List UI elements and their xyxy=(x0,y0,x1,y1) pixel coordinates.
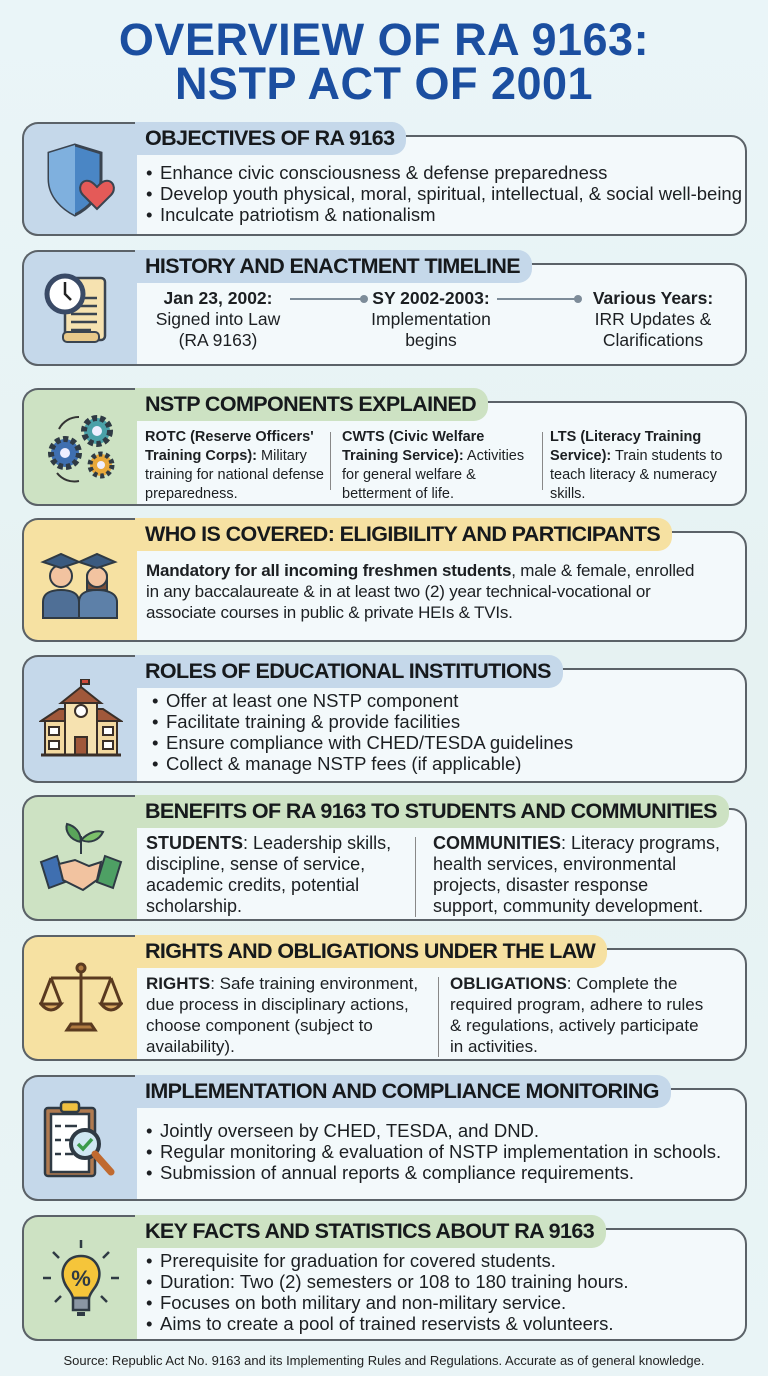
bullets: roles: Ensure compliance with CHED/TESDA guidelines xyxy=(166,732,573,753)
header: objectives xyxy=(135,122,406,155)
bullets: key facts: Duration: Two (2) semesters or 108 to 180 training hours. xyxy=(160,1271,629,1292)
column: students: discipline, sense of service, xyxy=(146,854,365,874)
panel: roles xyxy=(22,655,747,783)
bullets: key facts: Focuses on both military and non-military service. xyxy=(160,1292,566,1313)
timeline: Clarifications xyxy=(603,330,703,350)
timeline: IRR Updates & xyxy=(595,309,711,329)
column: rights: availability). xyxy=(146,1037,235,1056)
column: students: STUDENTS: Leadership skills, xyxy=(146,833,391,853)
title xyxy=(119,14,649,109)
bullets: roles: Collect & manage NSTP fees (if applicable) xyxy=(166,753,521,774)
header: rights xyxy=(135,935,607,968)
panel: rights xyxy=(22,935,747,1061)
column: communities: COMMUNITIES: Literacy programs, xyxy=(433,833,720,853)
header: objectives: OBJECTIVES OF RA 9163 xyxy=(145,126,394,150)
timeline: Jan 23, 2002: xyxy=(164,288,272,308)
bullets: objectives: Inculcate patriotism & nationalism xyxy=(160,204,436,225)
header: implementation xyxy=(135,1075,671,1108)
column: communities xyxy=(433,833,720,916)
column: obligations: OBLIGATIONS: Complete the xyxy=(450,974,677,993)
header: key facts xyxy=(135,1215,606,1248)
icon: lightbulb percent: % xyxy=(71,1266,90,1291)
bullets: key facts xyxy=(146,1250,629,1334)
panel: who is covered xyxy=(22,518,747,642)
icon: shield heart xyxy=(48,143,115,217)
panel: history xyxy=(22,250,747,366)
icon: clock scroll xyxy=(44,274,106,343)
bullets: roles: Offer at least one NSTP component xyxy=(166,690,458,711)
header: roles: ROLES OF EDUCATIONAL INSTITUTIONS xyxy=(145,659,551,683)
column: students: scholarship. xyxy=(146,896,242,916)
column: students: academic credits, potential xyxy=(146,875,359,895)
header: implementation: IMPLEMENTATION AND COMPLIANCE MONITORING xyxy=(145,1079,659,1103)
panel: implementation xyxy=(22,1075,747,1201)
panel: components xyxy=(22,388,747,506)
header: roles xyxy=(135,655,563,688)
bullets: implementation: Jointly overseen by CHED, TESDA, and DND. xyxy=(160,1120,539,1141)
timeline xyxy=(156,288,713,350)
bullets: key facts: Prerequisite for graduation for covered students. xyxy=(160,1250,556,1271)
column: communities: support, community development. xyxy=(433,896,703,916)
column: obligations: in activities. xyxy=(450,1037,538,1056)
panel: benefits xyxy=(22,795,747,921)
column: ROTC: ROTC (Reserve Officers' Training Corps): Military training for national defense preparedness. xyxy=(145,429,324,502)
title: NSTP ACT OF 2001 xyxy=(175,58,593,109)
icon: graduates xyxy=(40,552,118,619)
column: students xyxy=(146,833,391,916)
column: rights: due process in disciplinary actions, xyxy=(146,995,409,1014)
bullets: implementation xyxy=(146,1120,721,1183)
footer: source: Source: Republic Act No. 9163 and its Implementing Rules and Regulations. Accurate as of general knowledge. xyxy=(64,1353,704,1368)
column: rights: choose component (subject to xyxy=(146,1016,373,1035)
bullets: implementation: Submission of annual reports & compliance requirements. xyxy=(160,1162,634,1183)
timeline: begins xyxy=(405,330,457,350)
column: CWTS: CWTS (Civic Welfare Training Service): Activities for general welfare & betterment of life. xyxy=(342,429,524,502)
column: rights xyxy=(146,974,418,1056)
column: communities: health services, environmental xyxy=(433,854,676,874)
timeline: (RA 9163) xyxy=(179,330,257,350)
header: who is covered: WHO IS COVERED: ELIGIBILITY AND PARTICIPANTS xyxy=(145,522,660,546)
bullets: implementation: Regular monitoring & evaluation of NSTP implementation in schools. xyxy=(160,1141,721,1162)
icon: scales xyxy=(39,962,123,1032)
header: history xyxy=(135,250,532,283)
text: eligibility xyxy=(146,561,694,622)
icon: school building xyxy=(39,679,123,756)
bullets: roles: Facilitate training & provide facilities xyxy=(166,711,460,732)
icon: lightbulb percent xyxy=(43,1240,119,1316)
header: benefits: BENEFITS OF RA 9163 TO STUDENTS AND COMMUNITIES xyxy=(145,799,717,823)
title: OVERVIEW OF RA 9163: xyxy=(119,14,649,65)
text: eligibility: Mandatory for all incoming freshmen students, male & female, enrolled xyxy=(146,561,694,580)
bullets: key facts: Aims to create a pool of trained reservists & volunteers. xyxy=(160,1313,613,1334)
header: components: NSTP COMPONENTS EXPLAINED xyxy=(145,392,476,416)
icon: gears xyxy=(48,415,114,482)
column: obligations: & regulations, actively participate xyxy=(450,1016,699,1035)
bullets: objectives: Enhance civic consciousness & defense preparedness xyxy=(160,162,607,183)
icon: clipboard magnifier xyxy=(44,1100,114,1178)
header: key facts: KEY FACTS AND STATISTICS ABOUT RA 9163 xyxy=(145,1219,594,1243)
header: history: HISTORY AND ENACTMENT TIMELINE xyxy=(145,254,520,278)
icon: handshake plant xyxy=(40,822,122,892)
header: rights: RIGHTS AND OBLIGATIONS UNDER THE LAW xyxy=(145,939,595,963)
text: eligibility: associate courses in public & private HEIs & TVIs. xyxy=(146,603,513,622)
column: obligations: required program, adhere to rules xyxy=(450,995,703,1014)
timeline: Implementation xyxy=(371,309,491,329)
panel: objectives xyxy=(22,122,747,236)
header: components xyxy=(135,388,488,421)
bullets: objectives xyxy=(146,162,742,225)
column: LTS: LTS (Literacy Training Service): Train students to teach literacy & numeracy skills. xyxy=(550,429,722,502)
bullets: objectives: Develop youth physical, moral, spiritual, intellectual, & social well-being xyxy=(160,183,742,204)
header: who is covered xyxy=(135,518,672,551)
timeline: SY 2002-2003: xyxy=(372,288,490,308)
panel: key facts xyxy=(22,1215,747,1341)
text: eligibility: in any baccalaureate & in at least two (2) year technical-vocational or xyxy=(146,582,651,601)
column: communities: projects, disaster response xyxy=(433,875,648,895)
bullets: roles xyxy=(152,690,573,774)
timeline: Various Years: xyxy=(593,288,713,308)
column: rights: RIGHTS: Safe training environment, xyxy=(146,974,418,993)
column: obligations xyxy=(450,974,703,1056)
timeline: Signed into Law xyxy=(156,309,280,329)
